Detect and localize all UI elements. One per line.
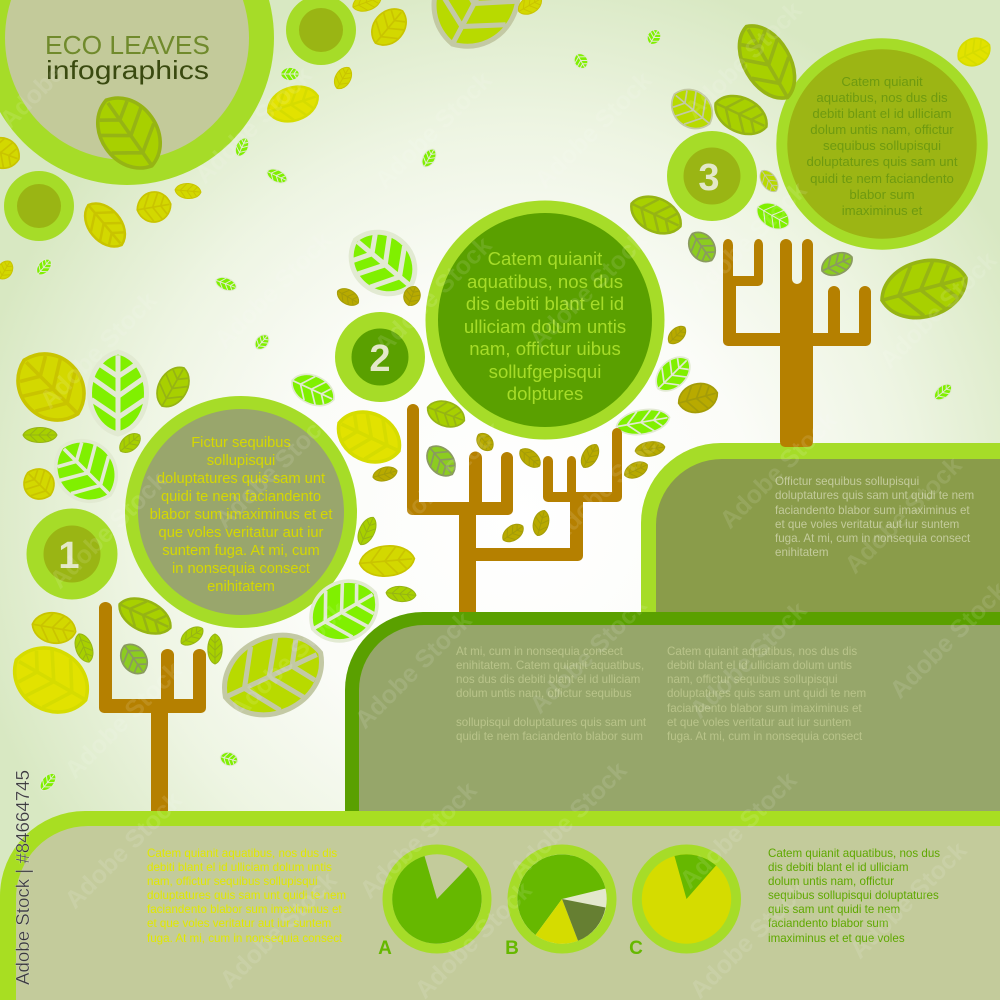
text column left: At mi, cum in nonsequia consect <box>456 645 624 658</box>
title: infographics <box>46 55 209 85</box>
watermark text: Adobe Stock <box>369 231 497 359</box>
panel: circle 1 text: quidi te nem faciandento <box>161 489 321 505</box>
panel: circle 3 text: blabor sum <box>849 187 915 202</box>
panel: circle 3 text: imaximinus et <box>842 203 923 218</box>
text column right: faciandento blabor sum imaximinus et <box>667 702 862 715</box>
text column right: debiti blant el id ulliciam dolum untis <box>667 659 852 672</box>
pie chart C: C <box>629 938 643 959</box>
watermark text: Adobe Stock <box>224 596 352 724</box>
number badge 2 <box>335 312 425 402</box>
stock id label: Adobe Stock | #84664745 <box>12 770 33 985</box>
watermark text: Adobe Stock <box>214 866 342 994</box>
panel: circle 1 text: que voles veritatur aut iur <box>159 525 324 541</box>
text block right: dis debiti blant el id ulliciam <box>768 861 908 874</box>
title: ECO LEAVES <box>45 32 210 60</box>
watermark text: Adobe Stock <box>684 596 812 724</box>
text block right <box>768 847 940 945</box>
panel: circle 3 text <box>776 38 988 250</box>
watermark text: Adobe Stock <box>874 246 1000 374</box>
text column left: dolum untis nam, offictur sequibus <box>456 687 632 700</box>
watermark text: Adobe Stock <box>379 416 507 544</box>
panel: circle 1 text: doluptatures quis sam unt <box>157 471 325 487</box>
watermark text: Adobe Stock <box>524 591 652 719</box>
watermark text: Adobe Stock <box>354 776 482 904</box>
decorative circle left <box>4 171 74 241</box>
text block left: debiti blant el id ulliciam dolum untis <box>147 861 332 874</box>
panel: circle 2 text: Catem quianit <box>488 248 603 269</box>
text column left <box>456 645 647 743</box>
pie chart C <box>629 844 741 959</box>
text block right: dolum untis nam, offictur <box>768 875 894 888</box>
panel: circle 3 text: Catem quianit <box>841 74 923 89</box>
panel: circle 2 text: sollufgepisqui <box>489 361 601 382</box>
text column left: quidi te nem faciandento blabor sum <box>456 730 643 743</box>
pie chart B: B <box>505 938 519 959</box>
panel: upper right text box: et que voles veritatur aut iur suntem <box>775 518 959 531</box>
pie chart B <box>505 844 616 959</box>
number badge 3: 3 <box>698 157 720 199</box>
panel: title circle <box>0 0 274 185</box>
watermark text: Adobe Stock <box>839 451 967 579</box>
text column right <box>667 645 866 743</box>
panel: circle 2 text: nam, offictur uibus <box>469 338 621 359</box>
text column right: Catem quianit aquatibus, nos dus dis <box>667 645 857 658</box>
panel: circle 3 text: debiti blant el id ulliciam <box>812 106 952 121</box>
text column right: doluptatures quis sam unt quidi te nem <box>667 687 866 700</box>
text block left <box>147 847 346 945</box>
watermark text: Adobe Stock <box>529 66 657 194</box>
watermark text: Adobe Stock <box>209 406 337 534</box>
panel: upper right text box: faciandento blabor sum imaximinus et <box>775 504 970 517</box>
panel: circle 3 text: aquatibus, nos dus dis <box>816 90 948 105</box>
text block left: doluptatures quis sam unt quidi te nem <box>147 889 346 902</box>
leaves: top left cluster <box>0 0 545 282</box>
leaves: cluster around circle 1 <box>1 339 389 731</box>
pie chart A: A <box>378 938 392 959</box>
panel: bottom chart box <box>0 811 1000 1000</box>
number badge 1: 1 <box>58 535 80 577</box>
panel: circle 2 text: dis debiti blant el id <box>466 293 624 314</box>
watermark text: Adobe Stock <box>844 836 972 964</box>
watermark text: Adobe Stock <box>44 466 172 594</box>
watermark text: Adobe Stock <box>714 406 842 534</box>
text block left: Catem quianit aquatibus, nos dus dis <box>147 847 337 860</box>
panel: circle 3 text: sequibus sollupisqui <box>823 138 941 153</box>
text block right: faciandento blabor sum <box>768 917 889 930</box>
panel: circle 1 text: sollupisqui <box>207 453 275 469</box>
text block right: quis sam unt quidi te nem <box>768 903 900 916</box>
watermark text: Adobe Stock <box>679 0 807 124</box>
panel: circle 2 text: ulliciam dolum untis <box>464 316 626 337</box>
tree 2 <box>407 404 622 612</box>
text block right: sequibus sollupisqui doluptatures <box>768 889 939 902</box>
watermark text: Adobe Stock <box>189 61 317 189</box>
panel: upper right text box <box>641 443 1000 612</box>
watermark text: Adobe Stock <box>349 606 477 734</box>
panel: upper right text box: fuga. At mi, cum in nonsequia consect <box>775 532 971 545</box>
panel: circle 3 text: quidi te nem faciandento <box>810 171 954 186</box>
tree 1 <box>99 602 206 811</box>
text block left: faciandento blabor sum imaximinus et <box>147 903 342 916</box>
number badge 2: 2 <box>369 338 391 380</box>
tree 3 <box>723 239 871 447</box>
panel: circle 3 text: doluptatures quis sam unt <box>806 154 958 169</box>
panel: upper right text box: enihitatem <box>775 546 828 559</box>
text block left: et que voles veritatur aut iur suntem <box>147 917 331 930</box>
panel: circle 1 text: in nonsequia consect <box>172 561 310 577</box>
watermark text: Adobe Stock <box>684 176 812 304</box>
panel: circle 2 text: dolptures <box>507 383 583 404</box>
title <box>45 32 210 85</box>
panel: upper right text box: doluptatures quis sam unt quidi te nem <box>775 489 974 502</box>
number badge 1 <box>26 508 118 600</box>
panel: circle 1 text: blabor sum imaximinus et et <box>150 507 332 523</box>
watermark text: Adobe Stock <box>59 786 187 914</box>
leaves: small scattered <box>33 27 955 794</box>
watermark text: Adobe Stock <box>524 226 652 354</box>
panel: circle 2 text: aquatibus, nos dus <box>467 271 623 292</box>
number badge 3 <box>667 131 757 221</box>
text column left: enihitatem. Catem quianit aquatibus, <box>456 659 644 672</box>
text column right: et que voles veritatur aut iur suntem <box>667 716 851 729</box>
text column left: nos dus dis debiti blant el id ulliciam <box>456 673 640 686</box>
watermark text: Adobe Stock <box>34 286 162 414</box>
watermark text: Adobe Stock <box>544 421 672 549</box>
text column left: sollupisqui doluptatures quis sam unt <box>456 716 647 729</box>
panel: circle 1 text <box>125 396 357 628</box>
watermark text: Adobe Stock <box>504 756 632 884</box>
text block right: imaximinus et et que voles <box>768 932 905 945</box>
watermark text: Adobe Stock <box>59 656 187 784</box>
text block left: nam, offictur sequibus sollupisqui <box>147 875 318 888</box>
panel: circle 1 text: Fictur sequibus <box>191 435 291 451</box>
panel: circle 2 text <box>426 200 664 440</box>
panel: circle 3 text: dolum untis nam, offictur <box>810 122 954 137</box>
text block left: fuga. At mi, cum in nonsequia consect <box>147 932 343 945</box>
pie chart A <box>378 844 492 959</box>
panel: middle text box <box>345 612 1000 811</box>
decorative circle top <box>286 0 356 65</box>
text column right: fuga. At mi, cum in nonsequia consect <box>667 730 863 743</box>
watermark text: Adobe Stock <box>369 66 497 194</box>
leaves: cluster around circle 3 <box>625 15 995 327</box>
panel: upper right text box: Offictur sequibus sollupisqui <box>775 475 919 488</box>
watermark text: Adobe Stock <box>209 226 337 354</box>
watermark text: Adobe Stock <box>674 766 802 894</box>
text column right: nam, offictur sequibus sollupisqui <box>667 673 838 686</box>
panel: circle 1 text: suntem fuga. At mi, cum <box>162 543 320 559</box>
panel: circle 1 text: enihitatem <box>207 579 275 595</box>
text block right: Catem quianit aquatibus, nos dus <box>768 847 940 860</box>
leaves: cluster around circle 2 <box>286 218 721 603</box>
